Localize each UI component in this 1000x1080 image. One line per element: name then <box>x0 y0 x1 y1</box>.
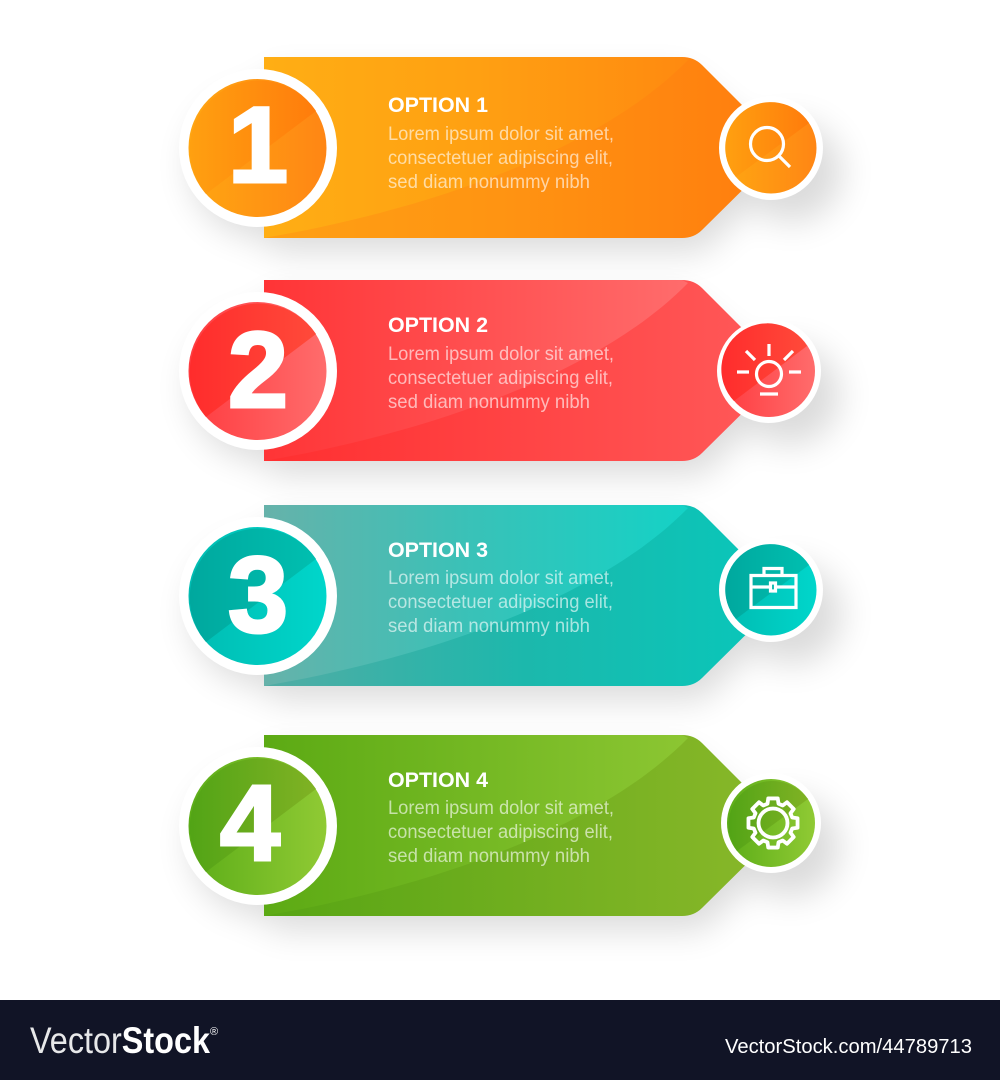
shadow: option 3 <box>190 523 842 700</box>
shadow: option 4 <box>190 753 840 930</box>
body text: option 2: Lorem ipsum dolor sit amet, <box>388 343 614 365</box>
heading: option 3: OPTION 3 <box>388 539 488 562</box>
body text: option 2: consectetuer adipiscing elit, <box>388 367 613 389</box>
icon badge: gear <box>721 773 821 873</box>
body text: option 1: Lorem ipsum dolor sit amet, <box>388 123 614 145</box>
heading: option 4: OPTION 4 <box>388 769 488 792</box>
body text: option 1: sed diam nonummy nibh <box>388 171 590 193</box>
body text: option 3: Lorem ipsum dolor sit amet, <box>388 567 614 589</box>
number badge: 4: 4 <box>220 762 280 883</box>
number badge: 3 <box>179 517 337 675</box>
heading: option 2: OPTION 2 <box>388 314 488 337</box>
body text: option 3: consectetuer adipiscing elit, <box>388 591 613 613</box>
banner: option 3 <box>264 505 785 686</box>
body text: option 4: consectetuer adipiscing elit, <box>388 821 613 843</box>
footer logo: VectorStock <box>30 1020 210 1061</box>
icon badge: magnifier <box>719 96 823 200</box>
number badge: 1 <box>179 69 337 227</box>
body text: option 3: sed diam nonummy nibh <box>388 615 590 637</box>
footer bar <box>0 1000 1000 1080</box>
body text: option 4: sed diam nonummy nibh <box>388 845 590 867</box>
panel: option 1 <box>179 57 842 252</box>
number badge: 2 <box>179 292 337 450</box>
banner: option 4 <box>264 735 785 916</box>
banner highlight: option 3 <box>264 505 688 686</box>
footer url: VectorStock.com/44789713 <box>725 1036 972 1058</box>
banner highlight: option 4 <box>264 735 688 916</box>
body text: option 4: Lorem ipsum dolor sit amet, <box>388 797 614 819</box>
number badge: 1: 1 <box>228 84 288 205</box>
panel: option 4 <box>179 735 840 930</box>
banner: option 2 <box>264 280 785 461</box>
banner highlight: option 2 <box>264 280 688 461</box>
panel: option 3 <box>179 505 842 700</box>
shadow: option 2 <box>190 298 840 475</box>
panel: option 2 <box>179 280 840 475</box>
body text: option 4 <box>388 797 614 867</box>
shadow: option 1 <box>190 75 842 252</box>
icon badge: briefcase <box>719 538 823 642</box>
body text: option 2: sed diam nonummy nibh <box>388 391 590 413</box>
body text: option 2 <box>388 343 614 413</box>
number badge: 2: 2 <box>228 309 288 430</box>
body text: option 1: consectetuer adipiscing elit, <box>388 147 613 169</box>
heading: option 1: OPTION 1 <box>388 94 488 117</box>
icon badge: light bulb <box>717 319 821 423</box>
banner: option 1 <box>264 57 785 238</box>
registered mark: ® <box>210 1026 218 1038</box>
body text: option 3 <box>388 567 614 637</box>
banner highlight: option 1 <box>264 57 688 238</box>
number badge: 3: 3 <box>228 534 288 655</box>
body text: option 1 <box>388 123 614 193</box>
number badge: 4 <box>179 747 337 905</box>
